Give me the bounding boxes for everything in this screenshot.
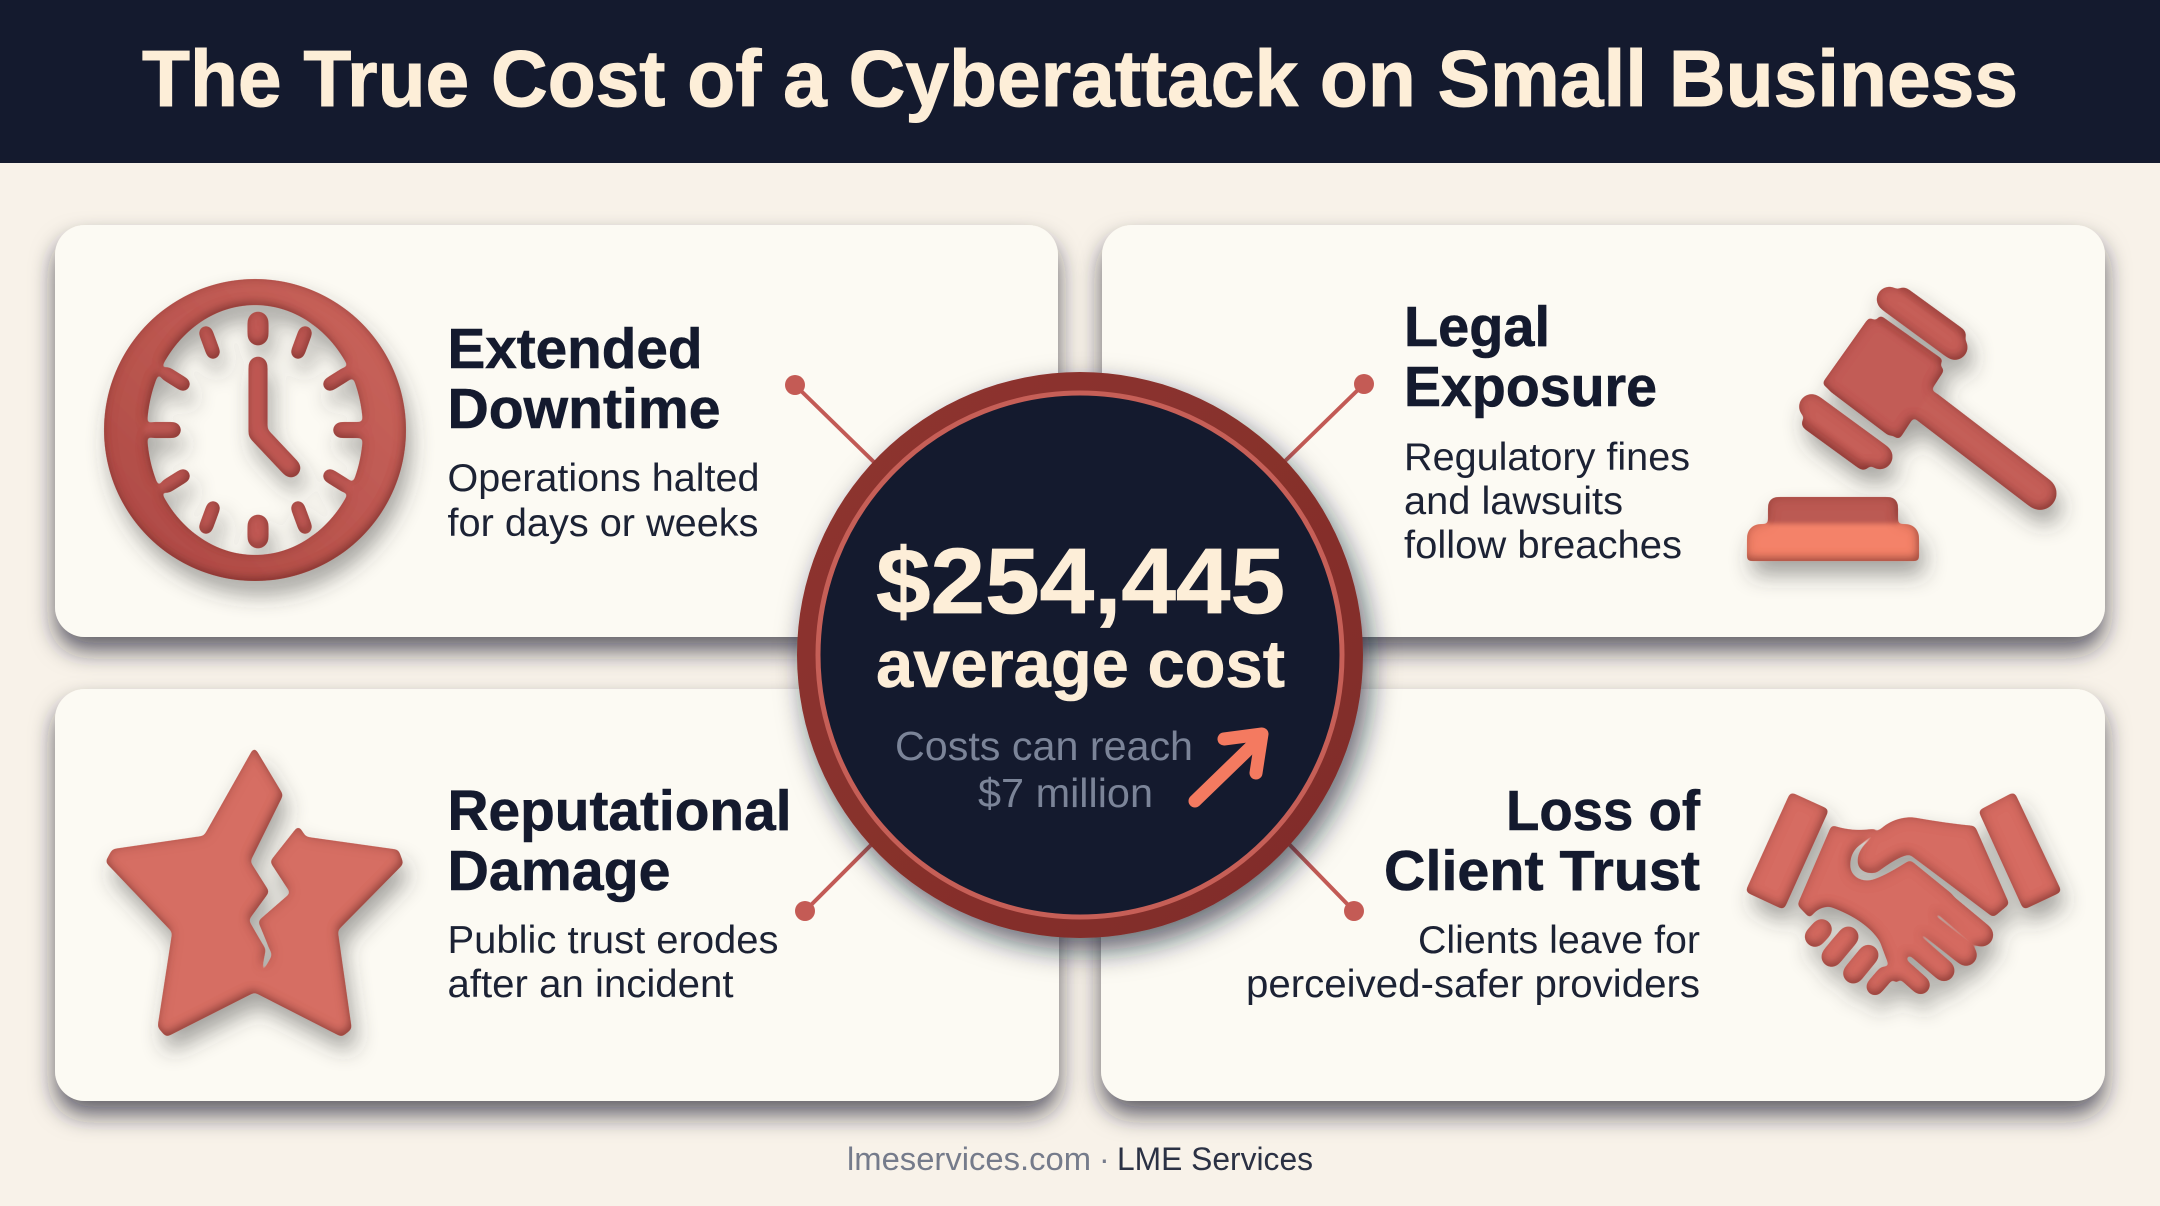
cost label: average cost [876, 627, 1285, 702]
icon: clock [104, 279, 406, 581]
icon: handshake [1748, 795, 2059, 987]
title: The True Cost of a Cyberattack on Small Business [142, 34, 2018, 123]
heading [1404, 295, 1657, 419]
footer: LME Services [1117, 1141, 1313, 1177]
body text: Regulatory fines [1404, 436, 1690, 479]
central cost badge [797, 372, 1363, 938]
icon: rising arrow [1195, 734, 1262, 801]
heading: Legal [1404, 295, 1550, 359]
body text: follow breaches [1404, 524, 1682, 567]
body text [448, 457, 760, 545]
heading [1384, 779, 1701, 903]
upper range note: $7 million [978, 770, 1153, 816]
heading [448, 317, 720, 441]
upper range note: Costs can reach [895, 723, 1193, 769]
heading [448, 779, 792, 903]
connectors [785, 374, 1374, 921]
body text: for days or weeks [448, 502, 758, 545]
body text: and lawsuits [1404, 480, 1623, 523]
cost figure: $254,445 [876, 529, 1285, 633]
footer: · [1099, 1141, 1110, 1177]
heading: Downtime [448, 377, 720, 441]
footer: lmeservices.com [847, 1141, 1091, 1177]
upper range note [895, 723, 1193, 816]
body text: Clients leave for [1418, 919, 1700, 962]
body text [448, 919, 778, 1006]
heading: Client Trust [1384, 839, 1700, 903]
body text: after an incident [448, 963, 734, 1006]
body text [1246, 919, 1700, 1006]
heading: Extended [448, 317, 702, 381]
icon: broken star [107, 750, 402, 1035]
heading: Exposure [1404, 355, 1657, 419]
heading: Damage [448, 839, 670, 903]
icon: gavel [1808, 295, 2040, 493]
icon: sound block [1747, 497, 1919, 561]
heading: Loss of [1506, 779, 1701, 843]
body text: Operations halted [448, 457, 760, 500]
panel: extended downtime [55, 225, 1058, 637]
panel: reputational damage [55, 689, 1059, 1101]
heading: Reputational [448, 779, 792, 843]
body text [1404, 436, 1690, 567]
panel: loss of client trust [1101, 689, 2105, 1101]
panel: legal exposure [1102, 225, 2105, 637]
footer [847, 1141, 1313, 1177]
body text: Public trust erodes [448, 919, 778, 962]
body text: perceived-safer providers [1246, 963, 1700, 1006]
header band [0, 0, 2160, 163]
